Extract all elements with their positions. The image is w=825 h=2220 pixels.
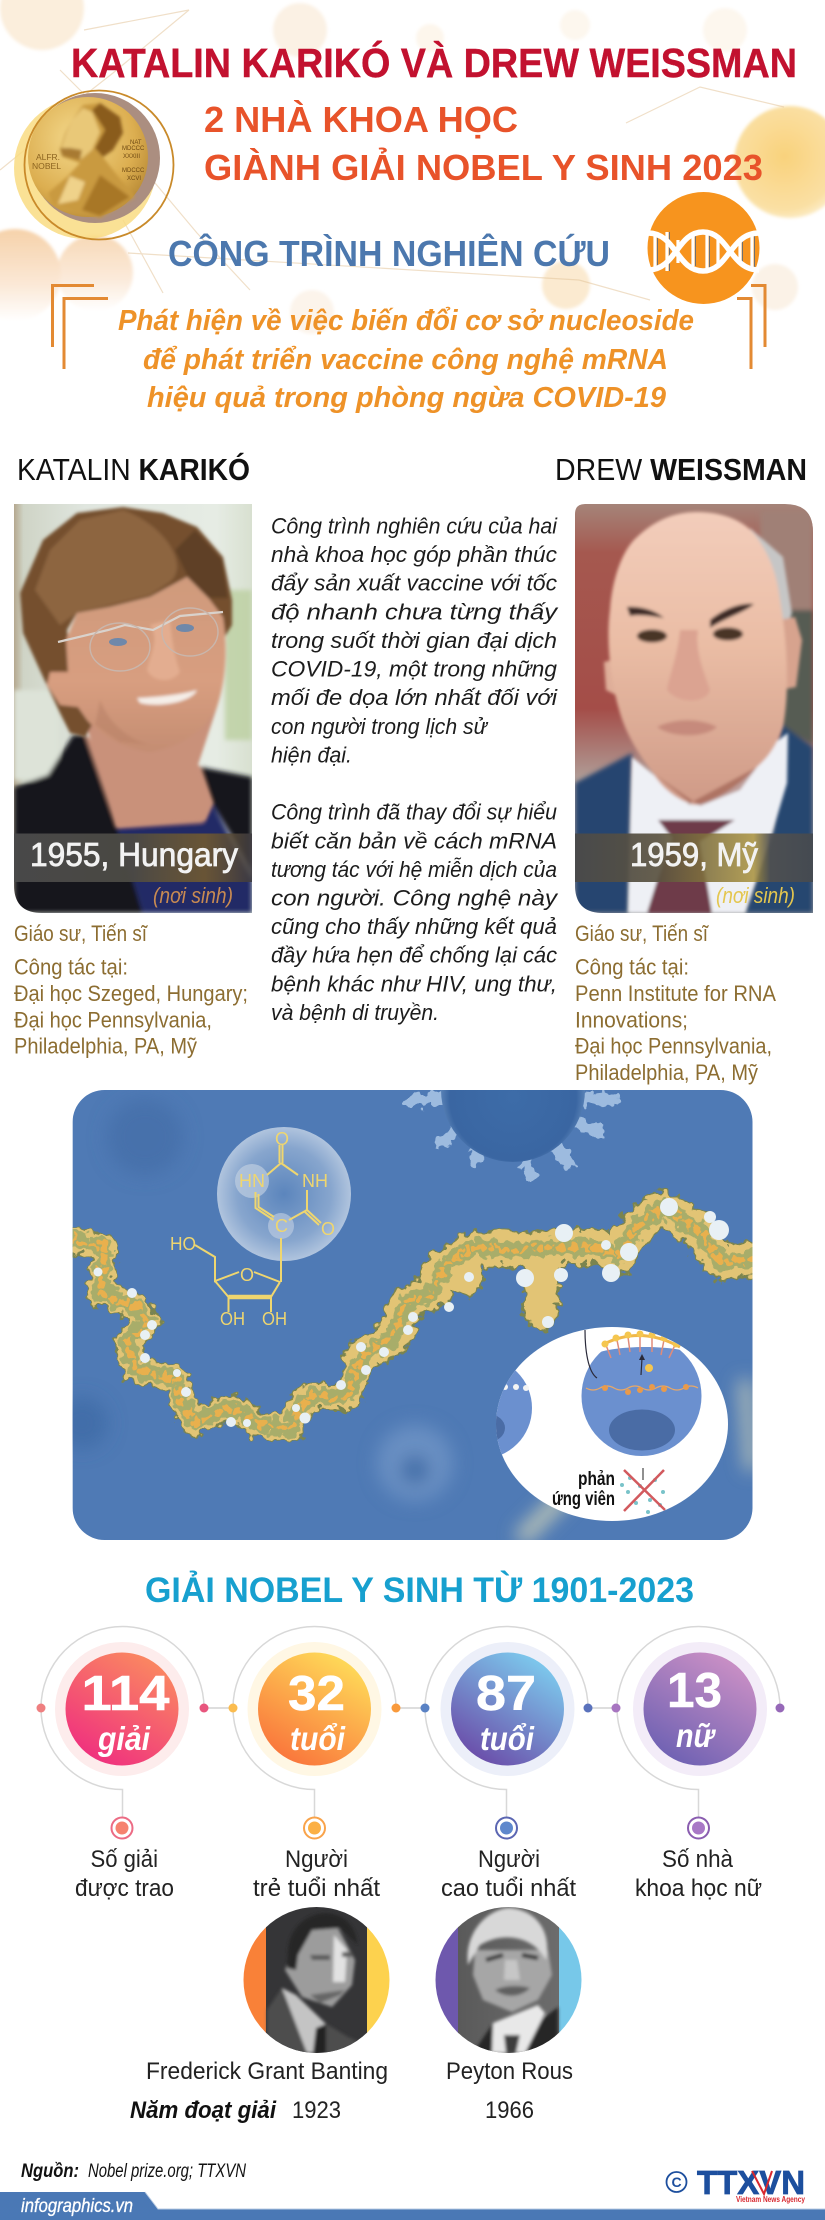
birth info: Weissman: 1959, Mỹ [630, 836, 758, 873]
text block: paragraph 2: biết căn bản về cách mRNA [271, 828, 557, 853]
stat: 32 years old: tuổi [290, 1720, 346, 1757]
stat: 87 years old: Người [478, 1846, 540, 1873]
molecule structure: HO [170, 1234, 196, 1254]
birth info: Karikó: (nơi sinh) [153, 883, 233, 908]
laureate names and years: 1966 [485, 2097, 534, 2124]
icon: Nobel medal: XCVI [127, 176, 141, 182]
birth info: Weissman: (nơi sinh) [716, 883, 795, 908]
footer bar [0, 2192, 825, 2220]
profile: Karikó [14, 921, 248, 1058]
profile: Weissman: Innovations; [575, 1008, 688, 1032]
heading: research work: CÔNG TRÌNH NGHIÊN CỨU [168, 232, 610, 274]
stat: 87 years old: tuổi [480, 1720, 535, 1757]
profile: Weissman [575, 921, 776, 1085]
molecule structure: C [275, 1216, 288, 1236]
icon: Nobel medal: ALFR. [36, 153, 60, 162]
profile: Weissman: Đại học Pennsylvania, [575, 1034, 772, 1058]
stat: 87 years old: 87 [476, 1667, 536, 1721]
birth info: Karikó: 1955, Hungary [30, 836, 238, 873]
stat: 87 years old [420, 1626, 592, 1902]
header decoration: golden blobs and lines [0, 0, 825, 334]
laureate names and years: Frederick Grant Banting [146, 2058, 388, 2085]
stat: 13 women: khoa học nữ [635, 1875, 762, 1902]
text block: paragraph 1: Công trình nghiên cứu của hai [271, 513, 558, 538]
portrait: Frederick Grant Banting [243, 1907, 390, 2053]
mRNA strand [68, 1198, 758, 1430]
stat: 13 women [612, 1626, 784, 1902]
text block: paragraph 2: con người. Công nghệ này [271, 886, 559, 910]
text block: paragraph 2: cũng cho thấy những kết quả [271, 914, 557, 939]
molecule structure: O [321, 1219, 335, 1239]
subtitle: GIÀNH GIẢI NOBEL Y SINH 2023 [204, 147, 763, 188]
stat: 114 prizes [36, 1626, 208, 1902]
icon: Nobel medal: MDCCC [122, 168, 145, 174]
profile: Weissman: Giáo sư, Tiến sĩ [575, 921, 709, 946]
molecule structure [170, 1127, 351, 1329]
inset: cell diagram: phản [578, 1469, 615, 1490]
birth info: Karikó [30, 836, 238, 908]
research summary: để phát triển vaccine công nghệ mRNA [143, 344, 668, 376]
connector lines [204, 1707, 616, 1709]
portrait: Peyton Rous [435, 1907, 582, 2053]
stat: 32 years old: Người [285, 1846, 348, 1873]
inset: cell diagram [496, 1327, 728, 1521]
text block: paragraph 2 [271, 800, 559, 1025]
footer bar: infographics.vn [21, 2196, 133, 2217]
text block: paragraph 1: mối đe dọa lớn nhất đối với [271, 685, 558, 710]
research summary [118, 305, 694, 414]
text block: paragraph 2: đầy hứa hẹn để chống lại các [271, 943, 557, 968]
subtitle: 2 NHÀ KHOA HỌC [204, 99, 518, 140]
text block: paragraph 2: bệnh khác như HIV, ung thư, [271, 971, 557, 996]
icon: Nobel medal: XXXIII [123, 154, 140, 160]
text block: paragraph 1: đẩy sản xuất vaccine với tốc [271, 571, 557, 596]
profile: Karikó: Đại học Szeged, Hungary; [14, 981, 248, 1006]
text block: paragraph 2: Công trình đã thay đổi sự hiểu [271, 800, 557, 825]
text block: paragraph 1: độ nhanh chưa từng thấy [271, 599, 559, 624]
stat: 114 prizes: 114 [82, 1667, 170, 1721]
inset: cell diagram: ứng viên [552, 1489, 615, 1510]
stat: 32 years old [228, 1626, 400, 1902]
virus [402, 1090, 622, 1182]
icon: Nobel medal [14, 90, 174, 240]
laureate names and years: 1923 [292, 2097, 341, 2124]
icon: Nobel medal: NAT [130, 140, 142, 146]
stat: 32 years old: trẻ tuổi nhất [253, 1875, 380, 1902]
stat: 114 prizes: giải [97, 1720, 151, 1757]
text block: paragraph 2: tương tác với hệ miễn dịch của [271, 857, 557, 882]
profile: Karikó: Đại học Pennsylvania, [14, 1008, 212, 1032]
research summary: Phát hiện về việc biến đổi cơ sở nucleoside [118, 305, 694, 337]
icon: Nobel medal: MDCCC [122, 146, 145, 152]
text block: paragraph 2: và bệnh di truyền. [271, 1000, 439, 1025]
birth info: Weissman [630, 836, 795, 908]
laureate names and years: Năm đoạt giải [130, 2097, 277, 2124]
molecule structure: OH [220, 1309, 245, 1329]
stat: 13 women: Số nhà [662, 1846, 734, 1873]
text block: paragraph 1: trong suốt thời gian đại dịch [271, 628, 557, 653]
text block: paragraph 1: hiện đại. [271, 742, 352, 767]
molecule structure: OH [262, 1309, 287, 1329]
stat: 114 prizes: được trao [75, 1875, 174, 1902]
photo: Katalin Karikó [14, 504, 252, 913]
icon: Nobel medal: NOBEL [32, 161, 61, 171]
molecule structure: HN [239, 1171, 265, 1191]
name: Katalin Karikó: KATALIN KARIKÓ [17, 451, 250, 487]
profile: Weissman: Penn Institute for RNA [575, 981, 776, 1006]
logo: TTXVN: TTXVN [697, 2164, 805, 2201]
panel: mRNA illustration [72, 1090, 752, 1540]
source: Nobel prize.org; TTXVN [88, 2161, 246, 2182]
profile: Weissman: Công tác tại: [575, 954, 689, 980]
profile: Karikó: Công tác tại: [14, 954, 128, 980]
stat: 13 women: nữ [676, 1717, 716, 1754]
profile: Weissman: Philadelphia, PA, Mỹ [575, 1060, 758, 1085]
laureate names and years [130, 2058, 573, 2124]
name: Drew Weissman: DREW WEISSMAN [555, 452, 807, 487]
text block: paragraph 1: COVID-19, một trong những [271, 656, 557, 682]
brackets [52, 286, 765, 369]
molecule structure: NH [302, 1171, 328, 1191]
profile: Karikó: Philadelphia, PA, Mỹ [14, 1034, 197, 1058]
text block: paragraph 1: nhà khoa học góp phần thúc [271, 542, 557, 567]
logo: TTXVN: C [671, 2174, 682, 2190]
research summary: hiệu quả trong phòng ngừa COVID-19 [147, 382, 666, 414]
heading: Nobel statistics: GIẢI NOBEL Y SINH TỪ 1901-2023 [145, 1570, 694, 1610]
photo: Drew Weissman [575, 504, 813, 913]
stat: 114 prizes: Số giải [90, 1846, 158, 1873]
laureate names and years: Peyton Rous [446, 2058, 573, 2085]
icon: DNA [646, 190, 762, 306]
logo: TTXVN: Vietnam News Agency [736, 2195, 805, 2204]
molecule structure: O [240, 1265, 254, 1285]
stat: 13 women: 13 [667, 1664, 722, 1718]
text block: paragraph 1 [271, 513, 559, 767]
stat: 32 years old: 32 [288, 1667, 345, 1721]
source: Nguồn: [21, 2161, 79, 2182]
subtitle [204, 99, 763, 188]
source [21, 2161, 246, 2182]
text block: paragraph 1: con người trong lịch sử [271, 714, 489, 739]
molecule structure: O [275, 1129, 289, 1149]
stat: 87 years old: cao tuổi nhất [441, 1875, 576, 1902]
profile: Karikó: Giáo sư, Tiến sĩ [14, 921, 148, 946]
